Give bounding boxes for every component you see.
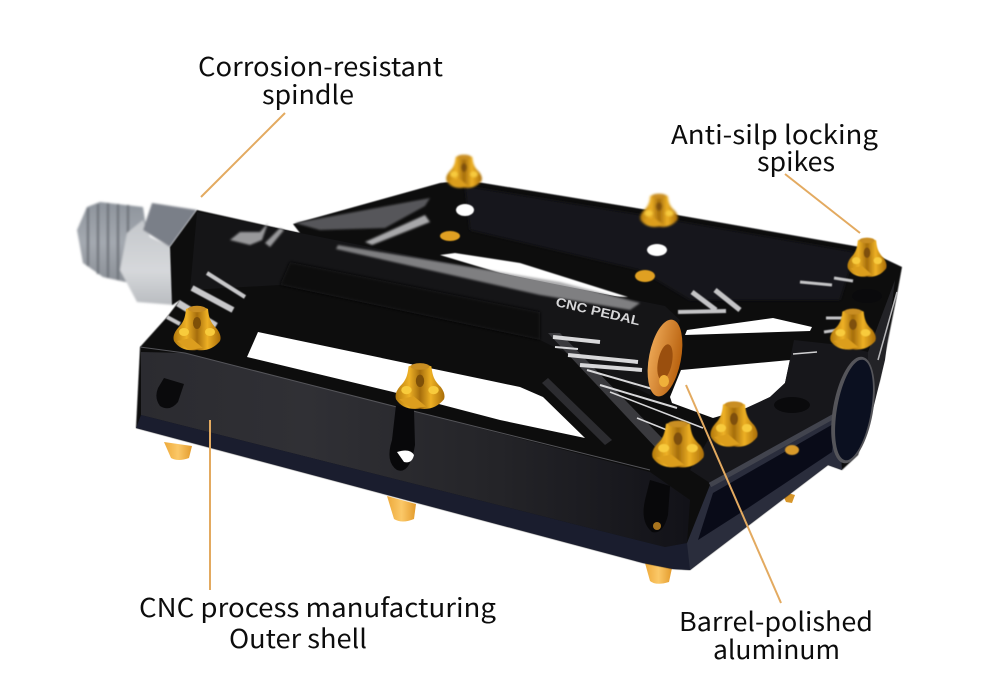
label: CNC outer shell: Outer shell <box>229 619 367 656</box>
spindle thread and collar <box>77 202 197 305</box>
gold locking spikes <box>174 155 887 467</box>
brace white stripes <box>553 337 782 430</box>
leader line: spikes <box>785 174 860 233</box>
label: CNC outer shell: CNC process manufacturing <box>139 588 496 625</box>
label: corrosion-resistant spindle: Corrosion-resistant <box>198 47 443 84</box>
front rail top ridge, face and lower edge <box>136 347 703 570</box>
rail slot with white gap <box>389 405 415 471</box>
text: CNC PEDAL: CNC PEDAL <box>554 294 642 328</box>
pedal mount plate and axle tube <box>687 280 897 570</box>
spindle tube <box>190 212 680 395</box>
label: barrel-polished aluminum: Barrel-polished <box>679 602 873 639</box>
small gold bottom details <box>440 231 799 455</box>
leader line: spindle <box>201 113 285 197</box>
rear rail shading <box>465 186 855 300</box>
label: corrosion-resistant spindle <box>198 47 443 112</box>
underside gold pins <box>164 442 795 584</box>
pedal body silhouette <box>136 180 902 570</box>
label: corrosion-resistant spindle: spindle <box>262 75 354 112</box>
label: CNC outer shell <box>139 588 496 656</box>
leader line: aluminum <box>686 385 781 603</box>
label: anti-slip locking spikes: spikes <box>757 142 835 179</box>
spindle blurred brand marks <box>230 223 640 310</box>
label: barrel-polished aluminum: aluminum <box>713 630 840 667</box>
diagonal brace <box>542 333 782 447</box>
left arm white stripes <box>167 273 245 326</box>
label: anti-slip locking spikes <box>671 115 878 179</box>
body windows <box>247 204 812 438</box>
barrel end cap <box>642 317 688 399</box>
leader line: outer shell <box>209 420 211 590</box>
rear arm stripes <box>678 278 853 332</box>
label: anti-slip locking spikes: Anti-silp locking <box>671 115 878 152</box>
rear arm grey marks <box>295 198 430 245</box>
label: barrel-polished aluminum <box>679 602 873 667</box>
